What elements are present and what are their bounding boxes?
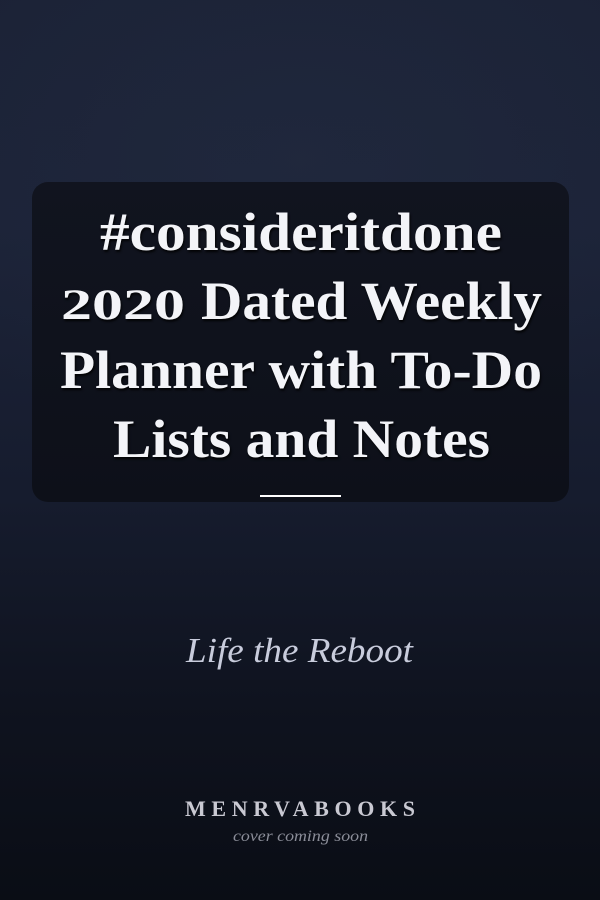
cover coming soon note: cover coming soon [233, 828, 368, 845]
panel: title backdrop [32, 182, 569, 502]
author name: Life the Reboot [185, 631, 414, 670]
publisher name: MENRVABOOKS [185, 796, 415, 821]
title: #consideritdone [100, 202, 502, 262]
title [60, 202, 542, 469]
title: Dated Weekly [201, 271, 542, 331]
title: 2020 [61, 282, 185, 329]
divider rule under title [260, 495, 341, 497]
title: Planner with To-Do [60, 340, 542, 400]
title: Lists and Notes [113, 409, 490, 469]
